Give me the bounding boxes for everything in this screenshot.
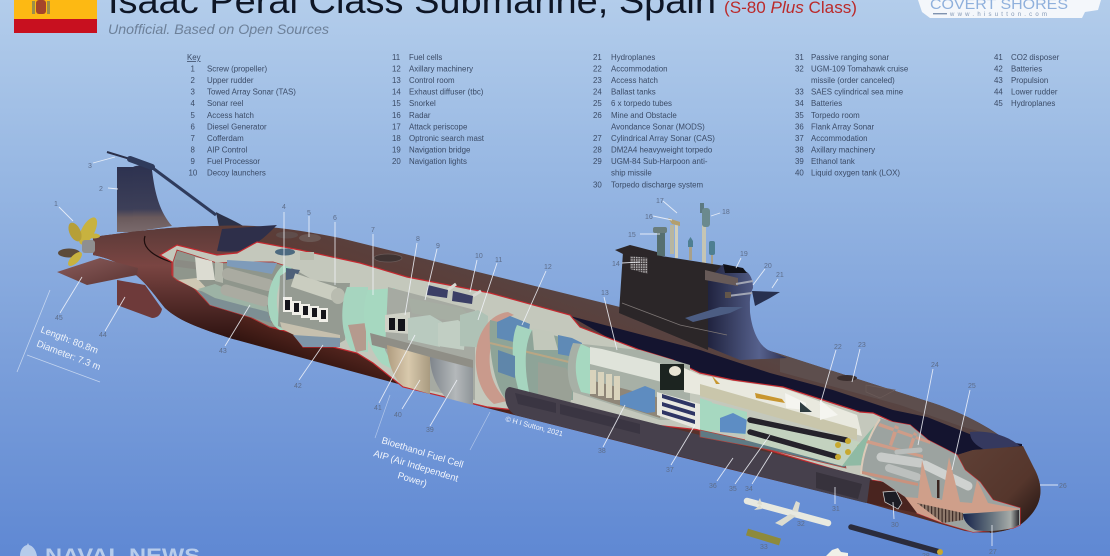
key, column 1: Access hatch xyxy=(207,111,254,120)
key, column 1: Upper rudder xyxy=(207,76,254,85)
AIP note xyxy=(372,435,465,490)
part number labels: 16 xyxy=(645,214,653,221)
key, column 2: 19 xyxy=(392,146,401,154)
key, column 3: ship missile xyxy=(611,169,652,178)
AIP note: AIP (Air Independent xyxy=(372,448,460,485)
key, column 1: 3 xyxy=(190,88,196,97)
Naval News logo xyxy=(20,543,200,556)
part number labels: 5 xyxy=(307,210,311,217)
sail cap xyxy=(615,245,657,257)
part number labels: 19 xyxy=(740,251,748,258)
key, column 5: CO2 disposer xyxy=(1011,53,1060,62)
disclaimer: Unofficial. Based on Open Sources xyxy=(108,21,329,37)
key, column 5: 45 xyxy=(994,99,1003,108)
part number labels: 14 xyxy=(612,261,620,268)
key, column 3 xyxy=(593,53,715,189)
part number labels: 4 xyxy=(282,204,286,211)
key, column 5: 41 xyxy=(994,53,1003,62)
navigation bridge xyxy=(723,264,747,273)
key, column 3: 22 xyxy=(593,64,602,74)
key, column 3: 24 xyxy=(593,88,602,97)
sail plane hydroplane xyxy=(685,307,743,322)
diesel generator xyxy=(278,268,350,347)
part number labels: 33 xyxy=(760,544,768,551)
dimensions text: Diameter: 7.3 m xyxy=(35,339,102,373)
key, column 1: Towed Array Sonar (TAS) xyxy=(207,88,296,97)
part number labels: 42 xyxy=(294,383,302,390)
key, column 2: Control room xyxy=(409,76,455,85)
part number labels: 36 xyxy=(709,483,717,490)
dark stern patch xyxy=(217,225,277,252)
key, column 5: Propulsion xyxy=(1011,76,1048,85)
part number labels: 43 xyxy=(219,348,227,355)
ballast tank frames xyxy=(905,457,1020,523)
key, column 4: missile (order canceled) xyxy=(811,76,895,85)
key, column 1: AIP Control xyxy=(207,146,247,154)
key, column 1 xyxy=(187,53,296,178)
sail front xyxy=(708,265,787,360)
key, column 2: 14 xyxy=(392,88,401,97)
forward deck tone xyxy=(780,354,1002,438)
fwd deck hatch xyxy=(837,375,895,398)
AIP control boxes xyxy=(385,312,410,334)
key, column 3: Cylindrical Array Sonar (CAS) xyxy=(611,134,715,143)
torpedo room xyxy=(712,403,875,466)
Sub-Harpoon missile xyxy=(826,548,848,556)
dark upper band xyxy=(570,316,1022,455)
submarine cutaway xyxy=(57,152,1040,556)
propeller xyxy=(58,215,101,268)
part number labels: 40 xyxy=(394,412,402,419)
key, column 3: Avondance Sonar (MODS) xyxy=(611,122,705,131)
key, column 2 xyxy=(392,53,485,166)
part number labels: 26 xyxy=(1059,483,1067,490)
key, column 2: Attack periscope xyxy=(409,122,468,131)
key, column 4: Batteries xyxy=(811,99,842,108)
torpedo xyxy=(851,527,943,555)
part number labels: 11 xyxy=(495,257,502,264)
part number labels: 23 xyxy=(858,342,866,349)
part number labels: 6 xyxy=(333,215,337,222)
part number labels: 18 xyxy=(722,209,730,216)
torpedo tubes xyxy=(881,450,968,486)
key, column 1: Diesel Generator xyxy=(207,122,267,131)
key, column 2: 12 xyxy=(392,64,401,74)
key, column 2: Navigation lights xyxy=(409,157,467,166)
Covert Shores logo: www.hisutton.com xyxy=(949,12,1047,18)
key, column 1: 1 xyxy=(190,64,195,74)
key, column 2: Snorkel xyxy=(409,99,436,108)
copper ring bulkhead xyxy=(476,312,514,404)
part number labels: 24 xyxy=(931,362,939,369)
key, column 3: Mine and Obstacle xyxy=(611,111,677,120)
key, column 3: 6 x torpedo tubes xyxy=(611,99,672,108)
flank array inner panels xyxy=(515,393,862,499)
part number labels: 10 xyxy=(475,253,483,260)
key, column 2: 16 xyxy=(392,111,401,120)
fuel processor xyxy=(408,298,468,324)
key, column 2: Axillary machinery xyxy=(409,64,473,74)
key, column 3: Access hatch xyxy=(611,76,658,85)
dimensions text: Length: 80.8m xyxy=(39,325,100,357)
part number labels: 35 xyxy=(729,486,737,493)
key, column 2: 11 xyxy=(392,53,400,62)
cofferdam rings xyxy=(342,287,398,372)
dimension arrow xyxy=(17,290,100,382)
bunks xyxy=(657,392,712,434)
decoy launchers xyxy=(427,284,481,304)
key, column 2: 18 xyxy=(392,134,401,143)
bow compartment xyxy=(861,418,1020,532)
part number labels: 9 xyxy=(436,243,440,250)
bow dome xyxy=(957,446,1040,533)
key, column 2: Fuel cells xyxy=(409,53,442,62)
key, column 4: Flank Array Sonar xyxy=(811,122,875,131)
key, column 3: UGM-84 Sub-Harpoon anti- xyxy=(611,157,708,166)
part number labels: 37 xyxy=(666,467,674,474)
part number labels: 25 xyxy=(968,383,976,390)
key, column 3: Ballast tanks xyxy=(611,88,656,97)
part number labels xyxy=(54,163,1067,556)
part number labels: 15 xyxy=(628,232,636,239)
torpedo discharge system xyxy=(867,480,917,513)
Covert Shores logo xyxy=(918,0,1101,18)
key, column 2: Optronic search mast xyxy=(409,134,485,143)
copyright: © H I Sutton, 2021 xyxy=(504,414,564,438)
key, column 3: Hydroplanes xyxy=(611,53,655,62)
key, column 2: 15 xyxy=(392,99,401,108)
stern section xyxy=(93,226,240,340)
key, column 4: Liquid oxygen tank (LOX) xyxy=(811,169,900,178)
key, column 5 xyxy=(994,53,1060,108)
key, column 3: 21 xyxy=(593,53,602,62)
key, column 4: UGM-109 Tomahawk cruise xyxy=(811,64,909,74)
key, column 3: Accommodation xyxy=(611,64,668,74)
key, column 5: 43 xyxy=(994,76,1003,85)
part number labels: 7 xyxy=(371,227,375,234)
part number labels: 17 xyxy=(656,198,664,205)
key, column 1: Decoy launchers xyxy=(207,169,266,178)
key, column 2: Radar xyxy=(409,111,431,120)
part number labels: 22 xyxy=(834,344,842,351)
key, column 3: 23 xyxy=(593,76,602,85)
key, column 3: 30 xyxy=(593,180,602,189)
exhaust louvre xyxy=(630,256,648,274)
key, column 5: Hydroplanes xyxy=(1011,99,1055,108)
interior cut-away xyxy=(160,242,1020,532)
part number labels: 20 xyxy=(764,263,772,270)
key, column 4: Torpedo room xyxy=(811,111,860,120)
part number labels: 44 xyxy=(99,332,107,339)
key, column 1: 9 xyxy=(190,157,196,166)
part number labels: 39 xyxy=(426,427,434,434)
bulkhead ring xyxy=(268,265,292,330)
Tomahawk missile xyxy=(747,498,828,526)
key, column 1: 6 xyxy=(190,122,196,131)
key, column 3: DM2A4 heavyweight torpedo xyxy=(611,146,713,154)
part number labels: 13 xyxy=(601,290,609,297)
key, column 4: 38 xyxy=(795,146,804,154)
AIP note: Power) xyxy=(396,470,428,490)
key, column 5: Lower rudder xyxy=(1011,88,1058,97)
key, column 4: 39 xyxy=(795,157,804,166)
sail body xyxy=(619,252,725,350)
control room xyxy=(568,343,690,420)
key, column 4: 33 xyxy=(795,88,804,97)
AIP note: Bioethanol Fuel Cell xyxy=(380,435,465,471)
masts xyxy=(653,203,715,264)
key, column 5: Batteries xyxy=(1011,64,1042,74)
key, column 2: 17 xyxy=(392,122,401,131)
upper rudder xyxy=(117,166,172,232)
key, column 1: Cofferdam xyxy=(207,134,244,143)
flank array sonar xyxy=(505,387,874,503)
part number labels: 3 xyxy=(88,163,92,170)
AIP section brackets xyxy=(375,395,490,450)
key, column 4: 31 xyxy=(795,53,804,62)
fuel cells xyxy=(408,310,488,350)
key, column 1: 7 xyxy=(190,134,195,143)
key, column 4: Ethanol tank xyxy=(811,157,855,166)
key, column 4: 34 xyxy=(795,99,804,108)
key, column 3: Torpedo discharge system xyxy=(611,180,704,189)
key, column 4: 40 xyxy=(795,169,804,178)
part number labels: 32 xyxy=(797,521,805,528)
part number labels: 45 xyxy=(55,315,63,322)
part number labels: 12 xyxy=(544,264,552,271)
key, column 1: 10 xyxy=(188,169,198,178)
key, column 4: Accommodation xyxy=(811,134,868,143)
key, column 4: Passive ranging sonar xyxy=(811,53,889,62)
key, column 1: 2 xyxy=(190,76,195,85)
key, column 2: Exhaust diffuser (tbc) xyxy=(409,88,484,97)
bow highlight xyxy=(970,432,1020,450)
part number labels: 8 xyxy=(416,236,420,243)
key, column 5: 42 xyxy=(994,64,1003,74)
key, column 3: 29 xyxy=(593,157,602,166)
sea mine xyxy=(747,532,780,542)
lower rudder xyxy=(117,280,162,318)
flag of Spain xyxy=(14,0,97,33)
part number labels: 21 xyxy=(776,272,784,279)
key, column 4: 36 xyxy=(795,122,804,131)
key, column 2: Navigation bridge xyxy=(409,146,471,154)
key, column 1: 8 xyxy=(190,146,196,154)
part number labels: 2 xyxy=(99,186,103,193)
key, column 4: Axillary machinery xyxy=(811,146,875,154)
part number labels: 34 xyxy=(745,486,753,493)
key, column 1: Screw (propeller) xyxy=(207,64,267,74)
key, column 4 xyxy=(795,53,909,178)
key, column 3: 27 xyxy=(593,134,602,143)
key, column 3: 28 xyxy=(593,146,602,154)
stern hydroplane xyxy=(57,258,138,285)
part number labels: 1 xyxy=(54,201,58,208)
key, column 1: Key xyxy=(187,53,201,62)
key, column 5: 44 xyxy=(994,88,1003,97)
part number labels: 38 xyxy=(598,448,606,455)
deck hatches xyxy=(275,232,402,262)
key, column 1: Sonar reel xyxy=(207,99,244,108)
leader lines xyxy=(59,157,1058,546)
key, column 4: SAES cylindrical sea mine xyxy=(811,88,904,97)
key, column 3: 25 xyxy=(593,99,602,108)
part number labels: 41 xyxy=(374,405,382,412)
accommodation xyxy=(684,368,862,440)
key, column 4: 32 xyxy=(795,64,804,74)
key, column 2: 13 xyxy=(392,76,401,85)
forward hydroplane xyxy=(752,291,780,306)
key, column 1: Fuel Processor xyxy=(207,157,260,166)
sail xyxy=(615,203,787,360)
key, column 2: 20 xyxy=(392,157,401,166)
pressure hull xyxy=(93,226,1040,533)
key, column 4: 35 xyxy=(795,111,804,120)
stern joint line xyxy=(144,236,178,264)
AIP compartment xyxy=(370,284,488,405)
towed array sonar fairing xyxy=(107,152,246,232)
part number labels: 30 xyxy=(891,522,899,529)
key, column 1: 5 xyxy=(190,111,196,120)
key, column 1: 4 xyxy=(190,99,196,108)
auxiliary machinery section xyxy=(490,316,660,404)
part number labels: 31 xyxy=(832,506,840,513)
cylindrical array sonar xyxy=(963,510,1019,531)
ballast beams xyxy=(866,423,930,458)
key, column 3: 26 xyxy=(593,111,602,120)
part number labels: 27 xyxy=(989,549,997,556)
stern machinery room xyxy=(173,250,283,328)
key, column 4: 37 xyxy=(795,134,804,143)
